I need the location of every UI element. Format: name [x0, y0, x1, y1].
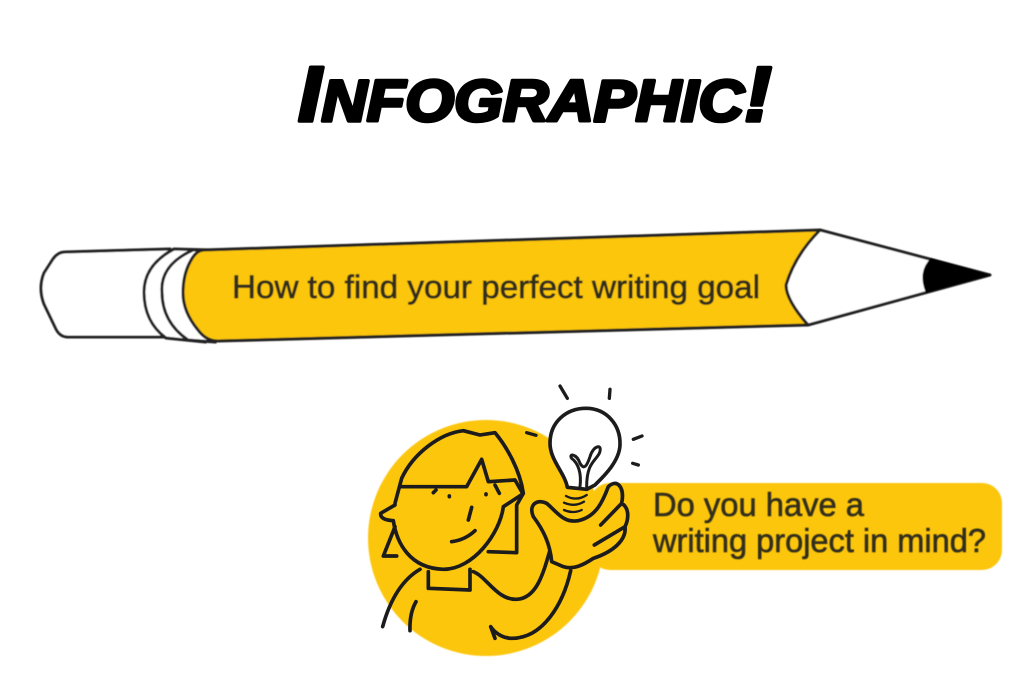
pencil lead	[922, 258, 992, 293]
facial features	[433, 485, 499, 542]
pencil	[41, 230, 992, 342]
pencil ferrule bands	[144, 249, 215, 342]
yellow circle	[368, 420, 604, 656]
question text: writing project in mind?	[652, 522, 986, 559]
character illustration	[381, 386, 642, 638]
face	[381, 494, 523, 569]
collar	[428, 569, 470, 590]
question banner	[590, 483, 1002, 570]
pencil tip	[786, 230, 990, 325]
hair	[395, 431, 523, 553]
pencil eraser	[41, 249, 170, 337]
icon: light bulb	[527, 386, 642, 512]
pencil label: How to find your perfect writing goal	[232, 269, 760, 305]
question text: Do you have a	[653, 486, 865, 523]
pencil yellow body	[183, 230, 820, 341]
hand	[532, 483, 628, 568]
title: INFOGRAPHIC !	[298, 50, 772, 138]
shoulders and arm	[383, 550, 571, 638]
